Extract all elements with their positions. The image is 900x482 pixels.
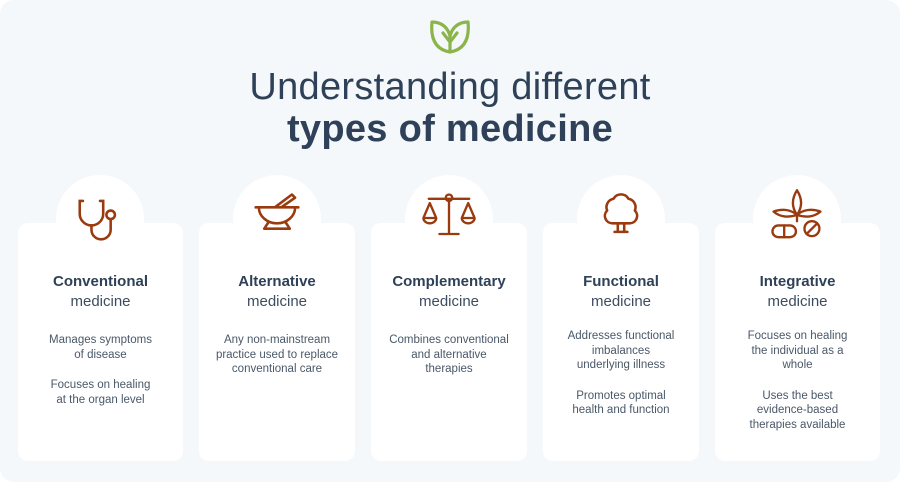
panel: complementary: medicine (419, 293, 479, 310)
panel: functional: Promotes optimal health and function (572, 390, 670, 416)
icon: tree (604, 193, 638, 234)
panel: integrative: medicine (767, 293, 828, 310)
panel: alternative: Alternative (238, 273, 316, 290)
panel: complementary: Combines conventional and alternative therapies (389, 334, 509, 375)
panel: functional: Functional (583, 273, 659, 290)
panel: conventional: medicine (70, 293, 131, 310)
icon: leaf logo (430, 20, 470, 54)
icon: stethoscope (78, 200, 116, 241)
panel: integrative (715, 223, 880, 461)
panel: integrative: Uses the best evidence-based therapies available (750, 390, 845, 430)
panel: complementary (371, 223, 527, 461)
title: Understanding different (249, 66, 651, 108)
panel: functional (543, 223, 699, 461)
icon: mortar and pestle (254, 193, 300, 230)
panel: functional: Addresses functional imbalances underlying illness (568, 330, 674, 371)
panel: integrative: Integrative (760, 273, 835, 290)
panel: alternative (199, 223, 355, 461)
panel: conventional: Focuses on healing at the organ level (51, 379, 150, 406)
domes (56, 175, 841, 223)
panel: alternative: medicine (247, 293, 307, 310)
title: types of medicine (287, 108, 613, 150)
icon: scales (422, 193, 476, 236)
panel: complementary: Complementary (392, 273, 506, 290)
title (249, 66, 651, 150)
panel: conventional (18, 223, 183, 461)
panel: alternative: Any non-mainstream practice used to replace conventional care (216, 334, 338, 375)
panel: integrative: Focuses on healing the individual as a whole (748, 330, 847, 371)
panel: conventional: Conventional (53, 273, 148, 290)
panel: functional: medicine (591, 293, 651, 310)
panel: conventional: Manages symptoms of disease (49, 334, 152, 360)
icon: herbs and pills (771, 189, 822, 238)
